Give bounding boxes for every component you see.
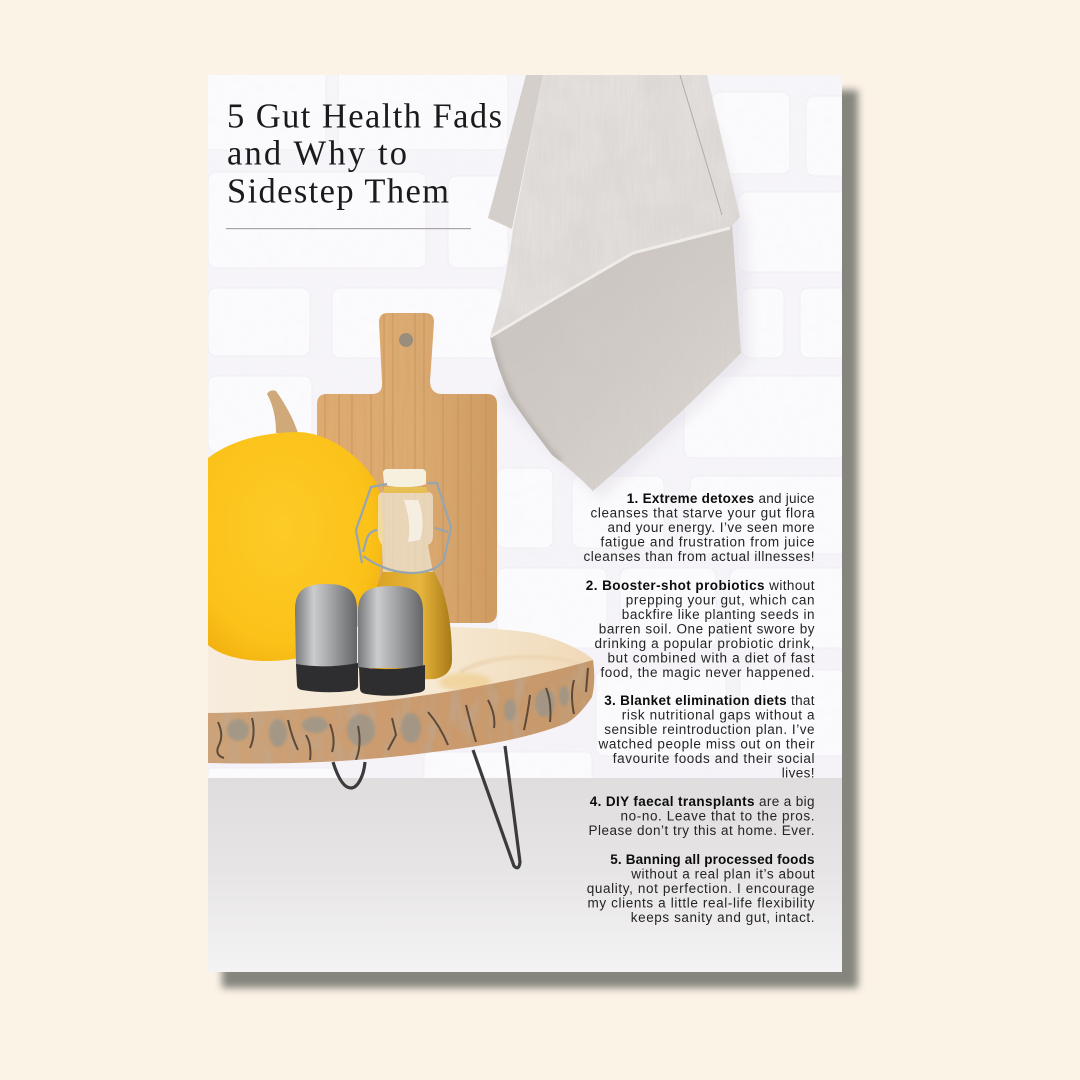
- brick wall: [196, 62, 856, 798]
- bottle stopper: [383, 469, 426, 487]
- text block: fad 1: fatigue and frustration from juice: [600, 534, 814, 550]
- text block: fad 2: backfire like planting seeds in: [622, 607, 814, 622]
- text block: fad 5: without a real plan it’s about: [630, 866, 815, 882]
- title: [227, 98, 502, 211]
- title: and Why to: [227, 134, 407, 172]
- bottle oil: [372, 570, 452, 681]
- towel: upper fold: [485, 75, 745, 340]
- text block: fad 4: Please don’t try this at home. Ever.: [588, 823, 814, 838]
- text block: fad 4: no-no. Leave that to the pros.: [620, 808, 814, 824]
- text block: fad 3: risk nutritional gaps without a: [622, 708, 815, 722]
- towel: side strip: [488, 75, 543, 229]
- pumpkin: [208, 390, 383, 661]
- text block: fad 1: cleanses that starve your gut flora: [590, 506, 815, 520]
- glass bottle: [356, 469, 452, 681]
- text block: fad 5: my clients a little real-life flexibility: [588, 896, 815, 910]
- table: [208, 627, 598, 868]
- towel: [480, 75, 750, 500]
- text block: fad 3: favourite foods and their social: [613, 751, 814, 766]
- table bark edge: [208, 655, 598, 767]
- text block: fad 3: watched people miss out on their: [598, 736, 815, 752]
- text block: fad 2: prepping your gut, which can: [626, 592, 814, 608]
- text block: fad 2: 2. Booster-shot probiotics without: [586, 578, 815, 593]
- text block: fad 5: quality, not perfection. I encourage: [587, 881, 814, 896]
- title: Sidestep Them: [227, 173, 449, 211]
- floor: [208, 778, 842, 972]
- towel: lower fold: [490, 226, 741, 491]
- text block: fad 5: [587, 852, 815, 925]
- board hole: [399, 333, 413, 347]
- text block: fad 5: 5. Banning all processed foods: [610, 852, 814, 867]
- text block: fad 2: barren soil. One patient swore by: [599, 622, 815, 636]
- text block: fad 3: [598, 693, 815, 780]
- text block: fad 3: 3. Blanket elimination diets that: [604, 693, 815, 708]
- bottle wire clasp: [356, 483, 451, 573]
- text block: fad 2: drinking a popular probiotic drink,: [594, 636, 814, 651]
- text block: fad 1: and your energy. I’ve seen more: [608, 520, 814, 535]
- title divider: [226, 228, 471, 229]
- text block: fad 1: [584, 491, 815, 564]
- text block: fad 4: 4. DIY faecal transplants are a big: [590, 794, 814, 809]
- panel: poster photo: [196, 62, 856, 972]
- title: 5 Gut Health Fads: [227, 98, 502, 136]
- text block: fad 3: lives!: [782, 766, 814, 780]
- bottle neck: [378, 492, 433, 572]
- text block: fad 2: food, the magic never happened.: [600, 665, 814, 680]
- text block: fad 4: [588, 794, 814, 838]
- text block: fad 1: 1. Extreme detoxes and juice: [627, 491, 814, 506]
- text block: fad 3: sensible reintroduction plan. I’ve: [604, 722, 814, 737]
- text block: fad 2: but combined with a diet of fast: [608, 650, 815, 666]
- right shaker: [358, 586, 425, 696]
- pumpkin stem: [267, 390, 298, 433]
- text block: fad 5: keeps sanity and gut, intact.: [631, 910, 814, 925]
- page shadow: [222, 90, 858, 988]
- text block: fad 1: cleanses than from actual illnesses!: [584, 549, 814, 564]
- table top surface: [208, 627, 593, 713]
- cutting board: [317, 313, 497, 623]
- salt and pepper shakers: [295, 584, 425, 696]
- pumpkin body: [208, 432, 383, 661]
- left shaker: [295, 584, 358, 692]
- table legs: [333, 746, 520, 868]
- text block: fad 2: [586, 578, 815, 680]
